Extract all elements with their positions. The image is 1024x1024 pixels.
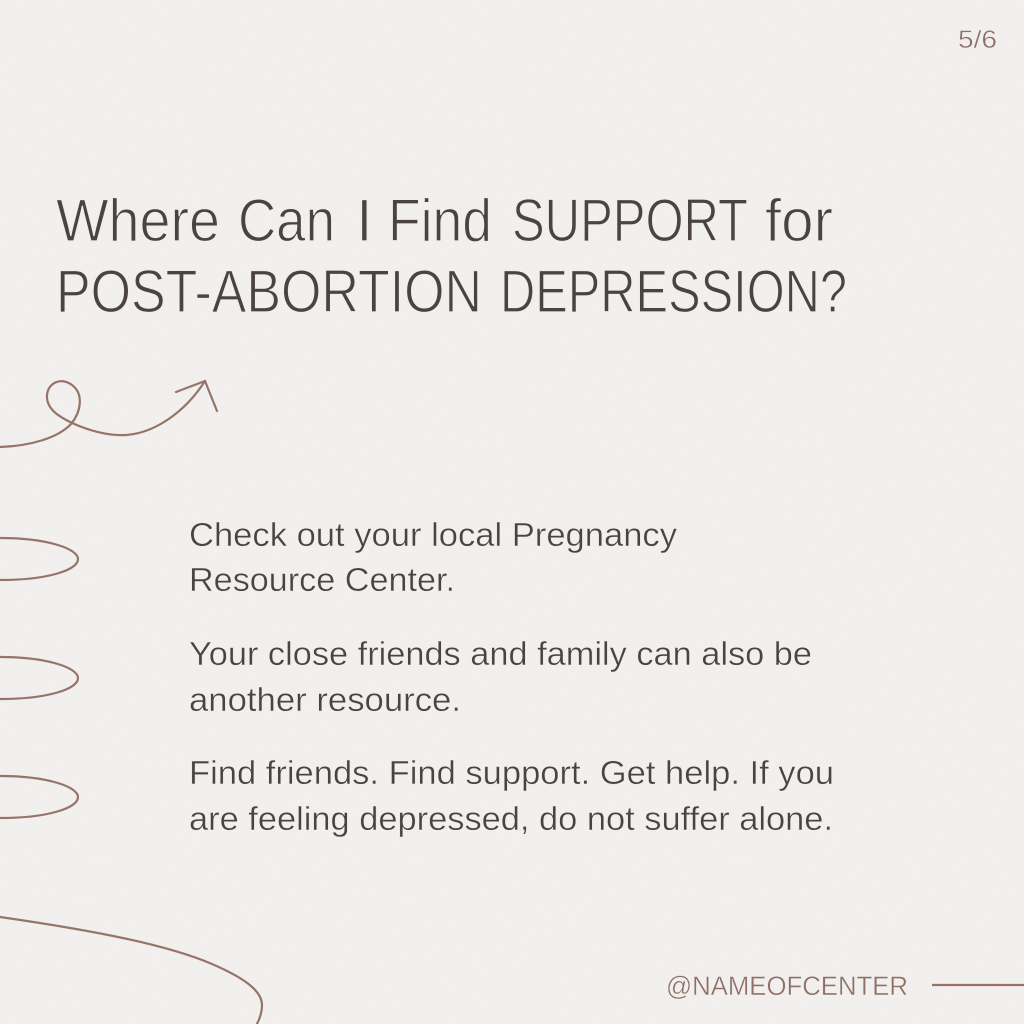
page number: 5/6 xyxy=(958,26,997,54)
title: DEPRESSION? xyxy=(500,258,847,325)
title: for xyxy=(765,187,833,254)
paragraph: pregnancy resource center: Resource Center. xyxy=(189,561,455,598)
paragraph: get help: Find friends. Find support. Get help. If you xyxy=(189,754,834,791)
footer line xyxy=(932,984,1024,986)
paragraph: pregnancy resource center xyxy=(189,516,678,598)
title: I xyxy=(356,187,373,254)
paragraph: get help xyxy=(189,754,834,837)
title: SUPPORT xyxy=(512,187,748,254)
title xyxy=(56,187,847,325)
footer handle: @NAMEOFCENTER xyxy=(666,971,908,1001)
paragraph: friends and family xyxy=(189,635,812,718)
title: POST-ABORTION xyxy=(56,258,482,325)
paragraph: get help: are feeling depressed, do not suffer alone. xyxy=(189,800,833,837)
decorative ovals xyxy=(0,538,262,1024)
icon: looping arrow xyxy=(0,381,217,447)
body text xyxy=(189,516,834,837)
paragraph: pregnancy resource center: Check out your local Pregnancy xyxy=(189,516,678,553)
title: Find xyxy=(388,187,492,254)
paragraph: friends and family: another resource. xyxy=(189,681,461,718)
paragraph: friends and family: Your close friends and family can also be xyxy=(189,635,812,672)
title: Can xyxy=(238,187,335,254)
title: Where xyxy=(56,187,220,254)
